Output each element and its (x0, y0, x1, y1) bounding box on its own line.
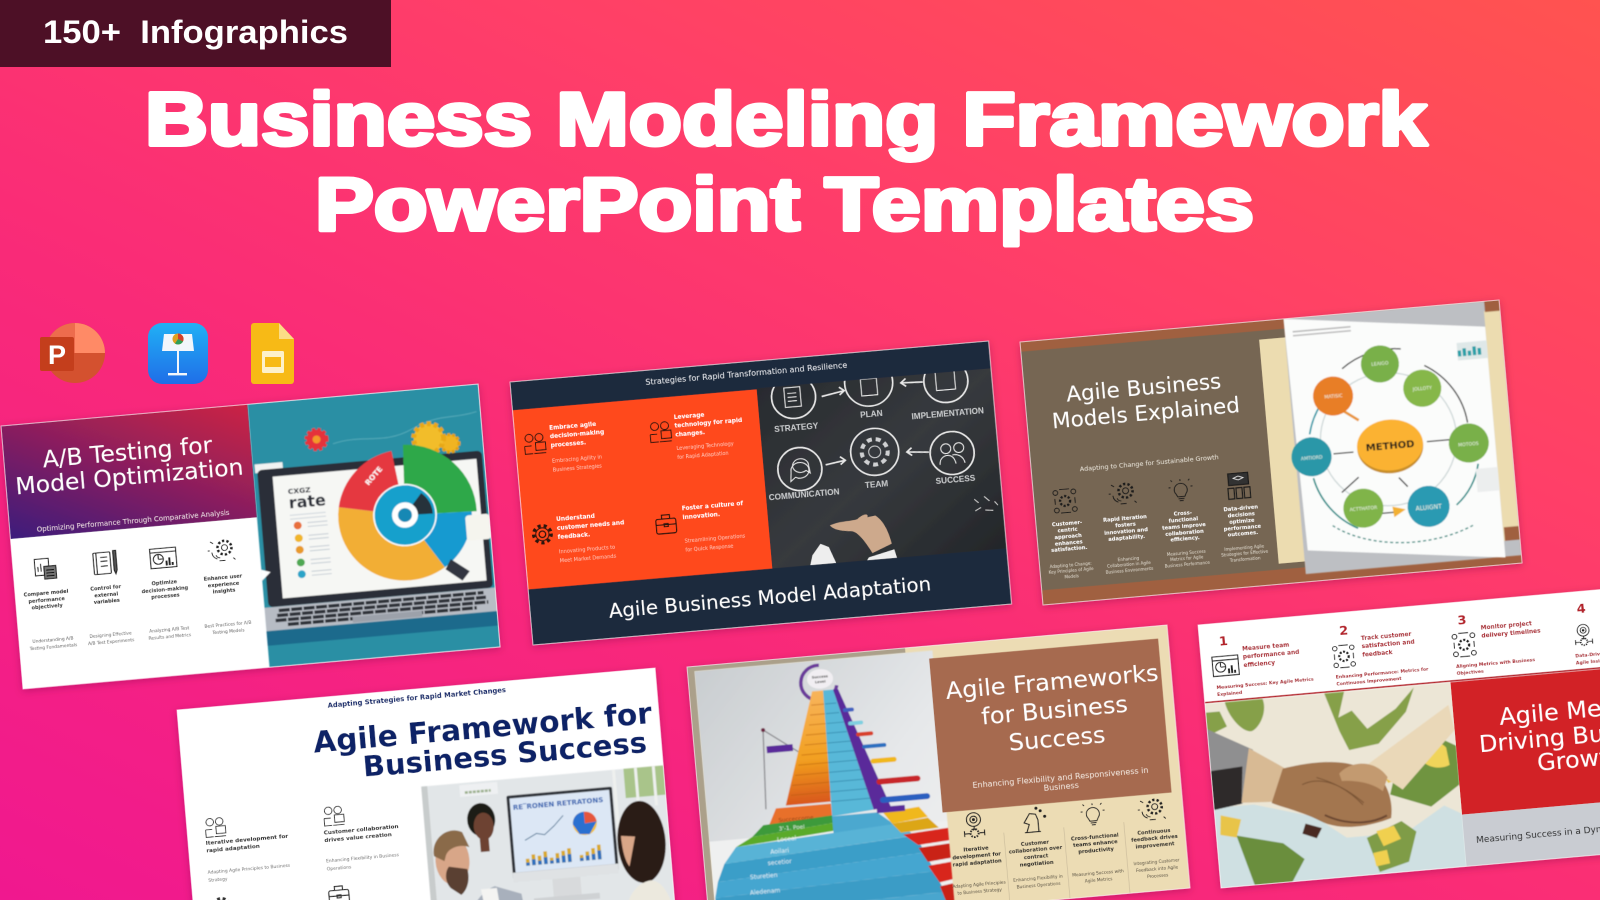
orange panel: Innovating Products to (559, 545, 615, 555)
title: Business Modeling Framework (145, 77, 1427, 161)
numbered metrics strip: Aligning Metrics with Business (1456, 657, 1536, 670)
feature labels: fosters (1115, 522, 1136, 529)
slide heading (1053, 376, 1238, 472)
feature captions (28, 620, 252, 652)
header panel (1, 404, 257, 539)
feature labels: objectively (31, 603, 64, 612)
chalkboard image: IMPLEMENTATION (911, 406, 984, 421)
feature list: Customer collaboration (324, 824, 399, 836)
feature labels: contract (1024, 853, 1049, 861)
slide 2: Agile Business Model Adaptation (510, 341, 1012, 645)
method diagram image: MOTOOS (1458, 441, 1479, 449)
slide 1: A/B Testing for Model Optimization (1, 384, 500, 689)
header panel: Model Optimization (14, 454, 244, 500)
feature list: drives value creation (324, 832, 392, 844)
feature labels: negotiation (1020, 860, 1054, 869)
feature labels: Customer- (1052, 520, 1082, 529)
slide 3: Agile Business Models Explained (1020, 300, 1522, 605)
feature captions (952, 857, 1181, 897)
orange panel: Meet Market Demands (560, 553, 617, 564)
feature labels: feedback drives (1131, 834, 1178, 844)
numbered metrics strip: Monitor project (1481, 621, 1532, 632)
feature labels (1049, 504, 1262, 554)
feature labels: optimize (1229, 518, 1255, 526)
slide heading: Adapting Strategies for Rapid Market Changes (327, 686, 506, 710)
orange panel: for Rapid Adaptation (677, 451, 729, 461)
meeting photo: RE‾RONEN RETRATONS (513, 796, 604, 812)
chalkboard image: COMMUNICATION (768, 487, 840, 502)
feature captions: Agile Metrics (1085, 876, 1113, 884)
icon row (34, 540, 236, 581)
orange panel: processes. (551, 440, 586, 449)
feature labels: variables (94, 598, 120, 606)
numbered metrics strip: delivery timelines (1481, 629, 1541, 640)
staircase image: Aoilari (770, 847, 790, 856)
laptop illustration: ROTE (363, 465, 384, 487)
icon: PowerPoint: P (48, 340, 66, 370)
feature labels (24, 573, 244, 612)
feature labels: rapid adaptation (952, 858, 1002, 868)
feature captions: Processes (1147, 872, 1169, 880)
staircase image: Aledenam (750, 887, 781, 897)
heading panel: Success (1008, 721, 1107, 757)
feature captions: Integrating Customer (1133, 857, 1180, 867)
feature labels: improvement (1135, 841, 1175, 851)
feature captions: Designing Effective (89, 630, 132, 640)
numbered metrics strip: Objectives (1456, 669, 1484, 677)
feature labels: teams enhance (1073, 839, 1119, 849)
feature captions: Collaboration in Agile (1107, 560, 1152, 569)
slide heading: Models Explained (1051, 393, 1241, 434)
title (145, 77, 1427, 246)
feature labels: processes (151, 593, 180, 601)
feature labels: decision-making (141, 585, 189, 595)
numbered metrics strip: Measure team (1242, 642, 1290, 653)
orange panel: changes. (675, 430, 705, 438)
slide 5: Agile Frameworks for Business Success (687, 625, 1190, 900)
orange panel: decision-making (550, 430, 605, 440)
feature captions: Results and Metrics (148, 632, 192, 642)
feature labels: Data-driven (1223, 505, 1259, 514)
feature labels: development for (952, 851, 1002, 862)
method diagram image: ACTTHATOR (1349, 505, 1378, 513)
feature captions: Understanding A/B (32, 635, 74, 645)
numbered metrics strip: performance and (1243, 650, 1300, 661)
feature list: Iterative development for (206, 834, 289, 847)
method diagram image: METHOD (1365, 439, 1415, 454)
orange panel: Leverage (674, 412, 705, 421)
feature labels: Rapid iteration (1103, 514, 1147, 524)
orange panel: Streamlining Operations (684, 534, 746, 545)
numbered metrics strip: Explained (1217, 690, 1243, 698)
orange panel: innovation. (682, 512, 720, 521)
numbered metrics strip: Track customer (1361, 632, 1412, 642)
method diagram image: JOLLOTY (1412, 385, 1432, 393)
feature labels: functional (1168, 516, 1199, 525)
feature list: rapid adaptation (206, 844, 260, 855)
feature labels: collaboration over (1009, 845, 1063, 856)
chalkboard image (755, 349, 1007, 569)
icon: Keynote (148, 323, 208, 384)
slide title: Agile Business Model Adaptation (608, 573, 932, 623)
feature captions: Testing Fundamentals (29, 642, 78, 652)
chalkboard image: STRATEGY (774, 421, 819, 434)
laptop illustration: rate (288, 491, 327, 512)
feature captions: Business Performance (1164, 560, 1211, 569)
feature labels: approach (1054, 533, 1082, 541)
heading panel (929, 639, 1172, 812)
feature captions: Business Operations (1016, 881, 1061, 890)
heading panel: for Business (980, 690, 1129, 731)
feature labels: Enhance user (204, 573, 243, 583)
method diagram image: MATISIC (1324, 393, 1343, 401)
feature labels: adaptability. (1108, 534, 1145, 543)
heading panel (1450, 662, 1600, 815)
badge: 150+ Infographics (0, 0, 391, 67)
laptop illustration (248, 384, 500, 667)
staircase image (694, 650, 955, 900)
feature labels: innovation and (1104, 527, 1149, 537)
icon: Google Slides (251, 323, 294, 384)
numbered metrics strip: 2 (1339, 623, 1349, 639)
feature captions: Adapting to Change: (1049, 560, 1092, 569)
staircase image: Succeccome (778, 815, 814, 824)
feature labels: Continuous (1137, 828, 1171, 837)
staircase image: Level (815, 679, 826, 684)
feature labels: Cross- (1174, 510, 1192, 518)
title: PowerPoint Templates (315, 162, 1254, 246)
feature list: Operations (327, 864, 352, 872)
orange panel: Understand (556, 514, 595, 523)
feature labels (952, 829, 1178, 867)
feature captions: Implementing Agile (1224, 543, 1265, 552)
feature captions: A/B Test Experiments (88, 637, 135, 647)
feature labels: collaboration (1165, 529, 1204, 538)
orange panel: for Quick Response (685, 543, 734, 553)
numbered metrics strip: Continuous Improvement (1336, 676, 1403, 687)
feature labels: insights (213, 588, 236, 596)
icon row (963, 796, 1166, 838)
feature captions: Business Environments (1106, 566, 1153, 575)
feature captions: Testing Models (211, 627, 246, 636)
chalkboard image: SUCCESS (935, 474, 976, 486)
numbered metrics strip: efficiency (1243, 660, 1276, 669)
feature labels: external (94, 591, 119, 599)
orange panel: Leveraging Technology (676, 441, 734, 452)
orange panel: feedback. (558, 532, 591, 541)
numbered metrics strip: Measuring Success: Key Agile Metrics (1216, 677, 1314, 691)
feature list: Enhancing Flexibility in Business (326, 852, 400, 865)
handshake map photo (1205, 682, 1467, 888)
method diagram image (1279, 300, 1521, 575)
chalkboard image: TEAM (865, 479, 889, 490)
orange panel: Embracing Agility in (552, 455, 602, 465)
feature captions: Best Practices for A/B (204, 620, 252, 630)
feature labels: Iterative (963, 846, 989, 854)
icon row (1053, 472, 1251, 515)
method diagram image: LEAIGO (1371, 361, 1389, 368)
feature labels: experience (208, 581, 240, 589)
feature labels: Control for (90, 584, 122, 593)
icon: PowerPoint (40, 323, 105, 383)
staircase image: Loceal (777, 835, 797, 844)
feature captions: Enhancing (1118, 555, 1140, 562)
staircase image: 3'-1. Poel (779, 824, 805, 833)
numbered metrics strip (1210, 598, 1600, 698)
header panel: A/B Testing for (41, 432, 214, 473)
orange panel (512, 389, 772, 589)
feature captions: Metrics for Agile (1170, 555, 1204, 562)
feature captions: Feedback into Agile (1136, 864, 1179, 874)
feature labels: satisfaction. (1051, 545, 1088, 554)
orange panel: Foster a culture of (682, 501, 744, 513)
slide heading: Adapting to Change for Sustainable Growth (1080, 454, 1219, 473)
feature labels: efficiency. (1170, 535, 1200, 544)
subtitle bar (1462, 802, 1600, 866)
feature captions: Adapting Agile Principles (952, 880, 1006, 890)
feature captions: Models (1064, 573, 1079, 580)
feature labels: outcomes. (1228, 530, 1258, 539)
laptop illustration: CXGZ (287, 485, 312, 496)
numbered metrics strip: 4 (1576, 602, 1586, 617)
method diagram image: AMTIORD (1301, 455, 1323, 463)
feature captions (1048, 543, 1269, 581)
feature list: Adapting Agile Principles to Business (207, 863, 291, 876)
feature captions: Measuring Success (1167, 548, 1206, 557)
method diagram image: ALUIGNT (1415, 503, 1442, 512)
feature labels: Compare model (24, 589, 69, 599)
feature labels: productivity (1078, 846, 1115, 856)
feature labels: Optimize (151, 579, 178, 587)
feature list (203, 801, 405, 900)
subtitle band: Strategies for Rapid Transformation and Resilience (645, 361, 848, 387)
feature captions: Key Principles of Agile (1048, 566, 1094, 575)
numbered metrics strip: satisfaction and (1361, 640, 1415, 650)
numbered metrics strip: 1 (1218, 634, 1229, 650)
slide 6: Agile Metrics Driving Business Growth (1198, 583, 1600, 888)
heading panel: Enhancing Flexibility and Responsiveness in (972, 766, 1149, 790)
orange panel: Business Strategies (553, 463, 603, 474)
staircase image: Sturetien (750, 872, 778, 881)
feature labels: performance (28, 596, 66, 605)
feature labels: centric (1057, 527, 1078, 535)
slide heading: Agile Business (1065, 369, 1222, 408)
heading panel: Agile Frameworks (945, 659, 1160, 705)
slide heading: Agile Framework for (312, 697, 654, 760)
feature list: Strategy (208, 876, 228, 884)
orange panel: Embrace agile (549, 422, 596, 432)
meeting photo (421, 765, 677, 900)
orange panel: technology for rapid (674, 418, 743, 430)
feature captions: Measuring Success with (1072, 868, 1124, 879)
chalkboard image: PLAN (860, 409, 883, 420)
badge: 150+ Infographics: 150+ Infographics (43, 14, 348, 50)
header panel: Optimizing Performance Through Comparative Analysis (36, 509, 230, 534)
numbered metrics strip: 3 (1457, 613, 1467, 629)
feature captions: Enhancing Flexibility in (1013, 874, 1063, 884)
numbered metrics strip: Enhancing Performance: Metrics for (1336, 666, 1429, 681)
staircase image: secetior (767, 858, 793, 867)
feature labels: performance (1224, 523, 1262, 533)
slide heading: Business Success (362, 725, 648, 784)
heading panel: Business (1043, 781, 1079, 793)
slide 4: Agile Framework for Business Success (177, 668, 677, 900)
feature labels: decisions (1227, 511, 1255, 520)
feature labels: Customer (1021, 839, 1050, 848)
feature captions: Analyzing A/B Test (149, 625, 190, 635)
feature captions: Strategies for Effective (1221, 549, 1269, 558)
feature labels: teams improve (1162, 522, 1207, 532)
feature captions: to Business Strategy (957, 887, 1003, 897)
feature labels: Cross-functional (1071, 832, 1119, 842)
feature captions: Transformation (1229, 555, 1261, 563)
numbered metrics strip: feedback (1362, 650, 1393, 659)
staircase image: Success (812, 674, 828, 680)
orange panel: customer needs and (557, 520, 625, 532)
feature labels: enhances (1055, 539, 1083, 547)
